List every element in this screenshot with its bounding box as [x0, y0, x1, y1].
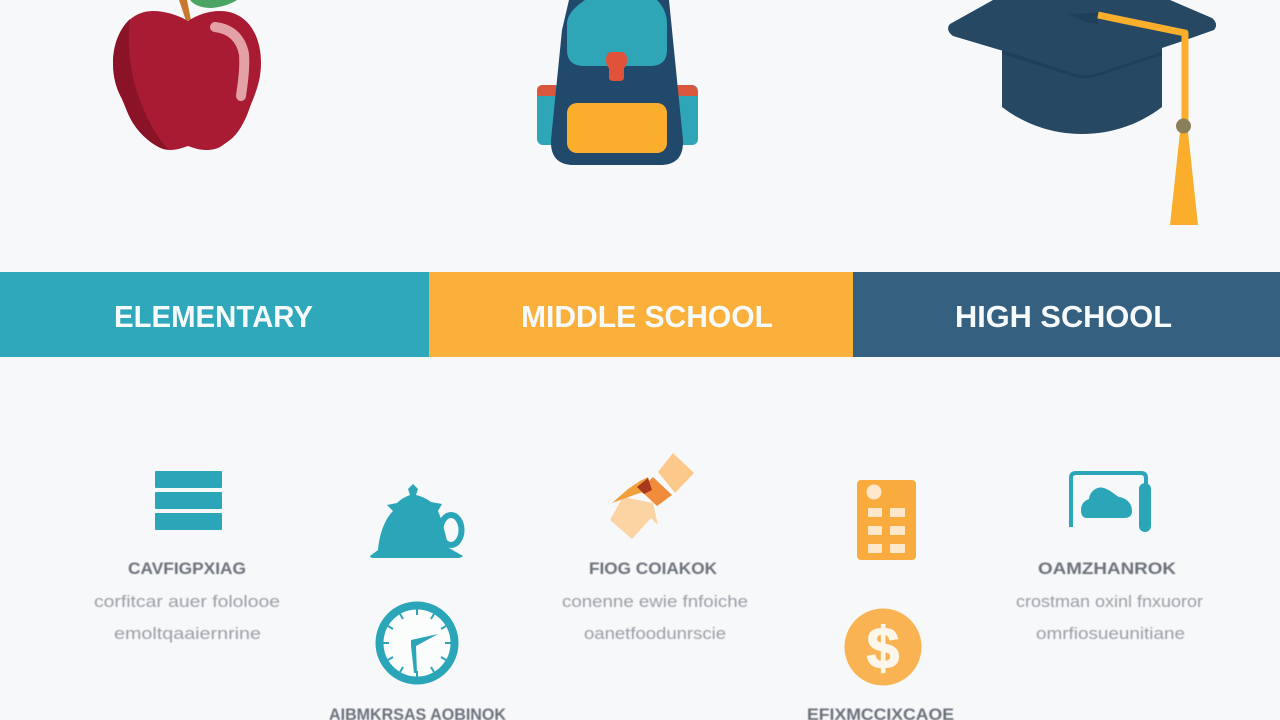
text block: first column: corfitcar auer fololooe [94, 592, 280, 611]
icon: diploma scroll [610, 453, 694, 539]
text block: third column [562, 559, 748, 643]
icon: clock [380, 606, 454, 680]
band: high school: HIGH SCHOOL [955, 299, 1172, 334]
text block: first column: emoltqaaiernrine [114, 624, 261, 643]
icon: graduation cap [948, 0, 1216, 225]
text block: fifth column: OAMZHANROK [1038, 559, 1177, 578]
icon: teapot [370, 484, 463, 558]
icon: calculator [857, 480, 916, 560]
text block: first column [94, 559, 280, 643]
band: elementary: ELEMENTARY [114, 299, 313, 334]
text block: fifth column [1016, 559, 1203, 643]
text block: third column: oanetfoodunrscie [584, 624, 726, 643]
text block: third column: conenne ewie fnfoiche [562, 592, 748, 611]
text block: first column: CAVFIGPXIAG [128, 559, 246, 578]
icon: apple [113, 0, 261, 150]
text block: third column: FIOG COIAKOK [589, 559, 718, 578]
band: high school [853, 272, 1280, 357]
icon: cloud frame [1071, 473, 1151, 532]
icon: dollar coin: $ [867, 616, 899, 681]
icon: stacked bars [155, 471, 222, 530]
band: middle school [429, 272, 853, 357]
icon: dollar coin [844, 608, 922, 686]
text block: fifth column: crostman oxinl fnxuoror [1016, 592, 1203, 611]
text block: fifth column: omrfiosueunitiane [1036, 624, 1185, 643]
icon: backpack [537, 0, 698, 165]
band: elementary [0, 272, 429, 357]
band: middle school: MIDDLE SCHOOL [521, 299, 773, 334]
